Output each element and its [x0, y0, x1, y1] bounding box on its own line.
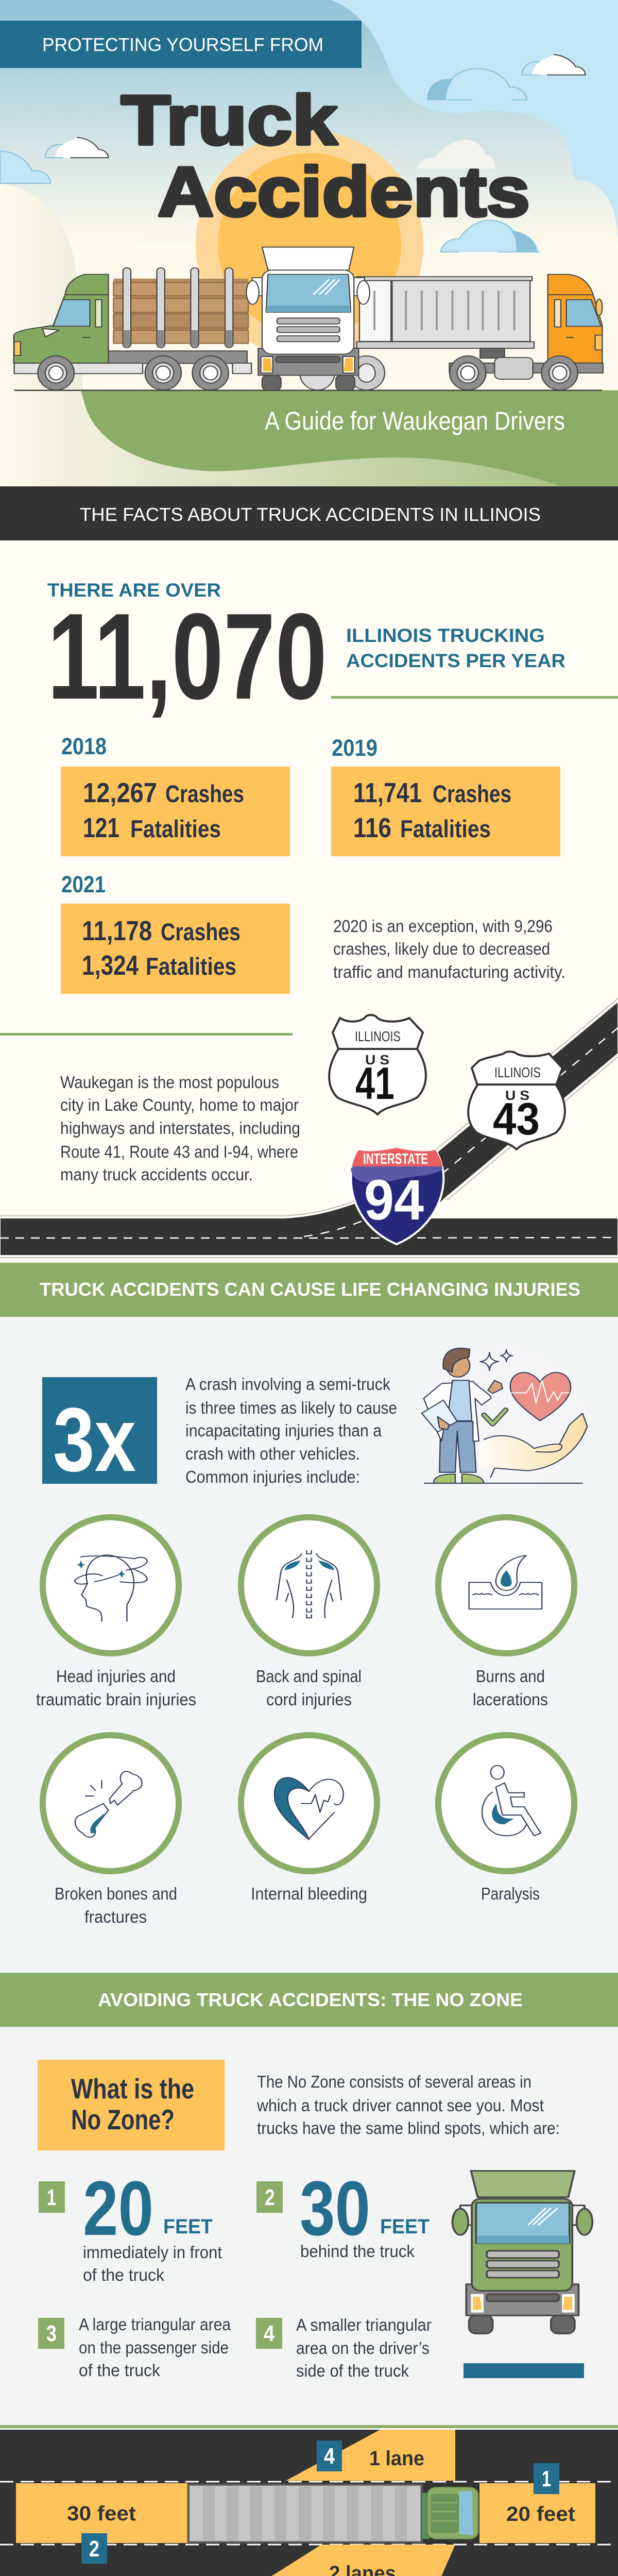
- text: Waukegan: Route 41, Route 43 and I-94, where: [60, 1142, 298, 1161]
- injury: burns and lacerations: lacerations: [473, 1690, 548, 1709]
- no zone road diagram: 20 feet: [506, 2503, 575, 2526]
- blind zone: front: [479, 2483, 595, 2543]
- item 3: passenger side: on the passenger side: [79, 2338, 229, 2357]
- stat card: 2018: 121: [83, 812, 119, 843]
- no zone panel background: [0, 2027, 618, 2425]
- note: 2020 exception: 2020 is an exception, with 9,296: [333, 917, 553, 936]
- no zone road diagram: 30 feet: [67, 2502, 136, 2525]
- marker 2: 2: [89, 2536, 99, 2562]
- blind zone: rear: [16, 2483, 187, 2543]
- item 4: driver side: side of the truck: [296, 2361, 409, 2380]
- item 1: 20 feet: immediately in front: [83, 2243, 222, 2262]
- section header: facts: THE FACTS ABOUT TRUCK ACCIDENTS IN ILLINOIS: [80, 504, 541, 525]
- stat card: 2021: [61, 871, 290, 994]
- marker 1: 1: [542, 2466, 551, 2492]
- injury: broken bones: Broken bones and: [55, 1884, 177, 1903]
- title: [121, 81, 530, 231]
- sign: Interstate 94: 94: [364, 1168, 424, 1232]
- sign: US 41: U S: [365, 1052, 389, 1067]
- marker 1: [534, 2463, 559, 2494]
- stat card: 2021: 1,324: [82, 950, 139, 981]
- stat card: 2019: 116: [353, 812, 391, 843]
- text: semi-truck: is three times as likely to cause: [185, 1398, 397, 1417]
- illustration: doctor with heart and hand: [422, 1343, 587, 1490]
- big statistic: 11,070: [47, 588, 327, 725]
- item 2: 30 feet: behind the truck: [300, 2242, 415, 2261]
- injury: back and spine: Back and spinal: [256, 1667, 362, 1686]
- text: Waukegan: many truck accidents occur.: [60, 1165, 253, 1184]
- item 3: passenger side: A large triangular area: [79, 2315, 231, 2334]
- text: no zone intro: The No Zone consists of several areas in: [257, 2072, 531, 2091]
- injury: internal bleeding: Internal bleeding: [251, 1884, 367, 1903]
- road: [0, 998, 618, 1258]
- 3x callout: 3x: [53, 1389, 136, 1490]
- truck: right orange truck with container: [300, 275, 603, 390]
- subtitle: A Guide for Waukegan Drivers: [265, 406, 565, 435]
- big statistic: [47, 580, 618, 725]
- truck: left green logging truck: [14, 268, 251, 390]
- stat card: 2018: 12,267: [83, 777, 157, 808]
- item 3: passenger side: 3: [46, 2321, 57, 2346]
- sign: US 41: [329, 1015, 426, 1114]
- text: no zone intro: [256, 2072, 560, 2138]
- text: Waukegan: Waukegan is the most populous: [60, 1073, 279, 1092]
- item 1: 20 feet: of the truck: [83, 2265, 164, 2284]
- stat card: 2019: Crashes: [433, 780, 511, 807]
- item 1: 20 feet: FEET: [163, 2215, 213, 2238]
- note: 2020 exception: crashes, likely due to decreased: [333, 939, 550, 958]
- section header: injuries: [0, 1263, 618, 1317]
- section header: facts: [0, 486, 618, 540]
- facts panel background: [0, 540, 618, 1263]
- note: 2020 exception: [333, 917, 565, 981]
- text: semi-truck: incapacitating injuries than a: [185, 1421, 382, 1440]
- stat card: 2019: Fatalities: [400, 815, 491, 842]
- section header: injuries: TRUCK ACCIDENTS CAN CAUSE LIFE CHANGING INJURIES: [40, 1279, 580, 1300]
- injury: back and spine: [241, 1517, 377, 1709]
- stat card: 2018: Crashes: [165, 780, 244, 807]
- callout: what is the no zone: No Zone?: [71, 2104, 175, 2136]
- item 2: 30 feet: 30: [300, 2165, 370, 2251]
- banner: [0, 21, 362, 68]
- sign: US 43: [468, 1052, 565, 1149]
- injury: broken bones: fractures: [84, 1907, 147, 1926]
- illustration: green truck front: [453, 2171, 592, 2333]
- stat card: 2021: 11,178: [82, 916, 152, 946]
- stat card: 2018: Fatalities: [130, 815, 221, 842]
- big statistic: THERE ARE OVER: [47, 580, 221, 601]
- sign: US 41: 41: [355, 1058, 394, 1109]
- labels: 1 lane: [369, 2447, 424, 2470]
- stat card: 2021: Fatalities: [146, 953, 236, 980]
- title: Accidents: [158, 152, 530, 231]
- sign: Interstate 94: [351, 1148, 443, 1244]
- section header: no zone: [0, 1973, 618, 2027]
- item 2: 30 feet: 2: [265, 2185, 275, 2210]
- banner: PROTECTING YOURSELF FROM: [42, 34, 323, 55]
- item 3: passenger side: of the truck: [79, 2361, 160, 2380]
- blue bar under truck: [464, 2363, 584, 2378]
- injury: burns and lacerations: Burns and: [476, 1667, 545, 1686]
- marker 2: [81, 2533, 107, 2564]
- marker 4: 4: [324, 2444, 335, 2469]
- sign: US 43: 43: [493, 1093, 540, 1144]
- item 2: 30 feet: [256, 2165, 430, 2261]
- item 1: 20 feet: 20: [83, 2165, 153, 2251]
- section header: no zone: AVOIDING TRUCK ACCIDENTS: THE NO ZONE: [98, 1989, 523, 2010]
- injury: internal bleeding: [241, 1735, 377, 1903]
- callout: what is the no zone: [38, 2060, 225, 2150]
- clouds: [0, 55, 585, 252]
- sign: US 43: ILLINOIS: [494, 1064, 541, 1080]
- stat card: 2021: 2021: [61, 871, 106, 897]
- text: semi-truck: [185, 1375, 397, 1486]
- text: Waukegan: city in Lake County, home to major: [60, 1095, 299, 1114]
- item 1: 20 feet: [39, 2165, 222, 2284]
- note: 2020 exception: traffic and manufacturing activity.: [333, 962, 565, 981]
- sign: Interstate 94: INTERSTATE: [363, 1151, 428, 1167]
- text: Waukegan: [60, 1073, 300, 1184]
- injury: head and brain: Head injuries and: [56, 1667, 176, 1686]
- injury: burns and lacerations: [438, 1517, 574, 1709]
- big statistic: ILLINOIS TRUCKING: [346, 625, 545, 646]
- item 4: driver side: [256, 2315, 432, 2380]
- stat card: 2018: [61, 733, 290, 856]
- injury: paralysis: [438, 1735, 574, 1903]
- callout: what is the no zone: What is the: [71, 2073, 194, 2105]
- item 4: driver side: 4: [264, 2321, 274, 2346]
- no zone road diagram: [0, 2425, 618, 2576]
- stat card: 2019: [331, 735, 560, 856]
- item 4: driver side: A smaller triangular: [296, 2315, 432, 2334]
- big statistic: ACCIDENTS PER YEAR: [346, 650, 565, 671]
- text: no zone intro: trucks have the same blind spots, which are:: [257, 2119, 560, 2138]
- divider: left: [0, 1033, 293, 1036]
- item 1: 20 feet: 1: [47, 2185, 56, 2210]
- stat card: 2021: Crashes: [161, 918, 241, 945]
- injury: back and spine: cord injuries: [266, 1690, 352, 1709]
- item 3: passenger side: [38, 2315, 231, 2380]
- item 2: 30 feet: FEET: [380, 2215, 430, 2238]
- blind zone: passenger side: [158, 2545, 455, 2576]
- sun: [196, 131, 423, 359]
- injury: paralysis: Paralysis: [481, 1884, 540, 1903]
- ground and hills: [0, 391, 618, 486]
- item 4: driver side: area on the driver’s: [296, 2338, 430, 2358]
- stat card: 2019: 11,741: [353, 777, 422, 808]
- text: semi-truck: Common injuries include:: [185, 1467, 360, 1486]
- sign: US 41: ILLINOIS: [355, 1028, 401, 1044]
- stat card: 2018: 2018: [61, 733, 107, 759]
- stat card: 2019: 2019: [332, 735, 377, 761]
- injury: head and brain: [36, 1517, 196, 1709]
- sign: US 43: U S: [505, 1088, 529, 1103]
- blind zone: driver side: [286, 2430, 455, 2481]
- text: semi-truck: A crash involving a semi-truck: [185, 1375, 390, 1394]
- text: Waukegan: highways and interstates, including: [60, 1118, 300, 1138]
- truck: top view: [188, 2485, 478, 2542]
- injury: broken bones: [43, 1735, 179, 1926]
- injury: head and brain: traumatic brain injuries: [36, 1690, 196, 1709]
- title: Truck: [121, 81, 337, 159]
- text: no zone intro: which a truck driver cannot see you. Most: [256, 2096, 544, 2115]
- text: semi-truck: crash with other vehicles.: [185, 1444, 360, 1463]
- hero background: [0, 0, 618, 486]
- truck: center white truck: [246, 247, 370, 391]
- injuries panel background: [0, 1317, 618, 1973]
- marker 4: [317, 2441, 342, 2471]
